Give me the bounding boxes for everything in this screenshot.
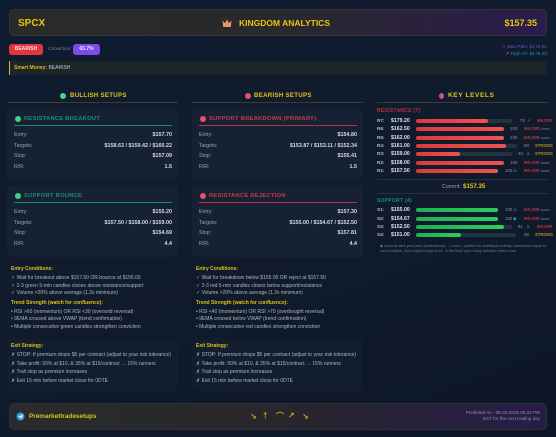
level S2 xyxy=(377,216,550,222)
heading: key levels: KEY LEVELS xyxy=(448,92,494,99)
level S1: S1: xyxy=(377,207,384,212)
level R4: R4: xyxy=(377,143,384,148)
level S4: 45 xyxy=(524,232,529,237)
conviction badge: 65.7% xyxy=(79,46,94,52)
card: support bounce: Entry: xyxy=(14,209,28,215)
card: support breakdown: Entry: xyxy=(199,132,213,138)
card: resistance rejection xyxy=(192,185,363,257)
trend strength heading: Trend Strength (watch for confluence): xyxy=(11,300,103,306)
icon: down arrow end: ↘ xyxy=(302,412,309,421)
level S4 xyxy=(377,232,553,238)
smart money bar xyxy=(9,61,547,75)
level R1: 100 xyxy=(505,168,512,172)
card: support bounce: $157.50 / $158.00 / $159.00 xyxy=(105,220,172,226)
card: resistance rejection: $155.00 / $154.67 / $152.50 xyxy=(290,220,357,226)
card: support bounce: Targets: xyxy=(14,220,32,226)
trend strength list: • 9EMA crossed below VWAP (trend confirmation) xyxy=(196,316,306,322)
level R5: $162.00 xyxy=(391,134,410,140)
trend strength list xyxy=(11,308,141,330)
bearish badge xyxy=(9,44,43,55)
card: resistance breakout: R/R: xyxy=(14,164,24,170)
level S2: $154.67 xyxy=(391,216,410,222)
card: support bounce xyxy=(7,185,178,257)
heading: bullish setups: BULLISH SETUPS xyxy=(70,92,127,99)
entry conditions list xyxy=(11,275,144,296)
level S4: STRONG xyxy=(535,232,553,237)
panel: key levels xyxy=(377,92,553,253)
entry conditions list: ✓ Wait for breakdown below $155.00 OR reject at $157.50 xyxy=(196,275,326,281)
level R4: STRONG xyxy=(535,143,553,148)
card: resistance breakout: $158.63 / $159.42 / $160.22 xyxy=(105,143,172,149)
exit strategy list xyxy=(196,352,356,384)
level S3: ⚓ xyxy=(526,224,530,229)
panel: bearish conditions xyxy=(196,266,326,330)
level S1: $155.00 xyxy=(391,207,410,213)
level R5 xyxy=(377,134,550,140)
card: resistance breakout: $157.09 xyxy=(152,153,172,159)
level R1: MAJOR xyxy=(524,168,539,172)
card: resistance breakout: Targets: xyxy=(14,143,32,149)
title: KINGDOM ANALYTICS xyxy=(239,18,330,28)
panel: bearish exit strategy xyxy=(192,338,363,391)
resistance heading: RESISTANCE (7) xyxy=(377,108,421,114)
card: resistance rejection: Entry: xyxy=(199,209,213,215)
card: resistance rejection: $157.30 xyxy=(338,209,357,215)
level S1: ⚓ xyxy=(513,207,517,212)
current price row: Current: xyxy=(442,184,461,190)
icon: crown xyxy=(222,20,232,27)
exit strategy list: ✗ STOP: If premium drops $5 per contract (adjust to your risk tolerance) xyxy=(196,352,356,358)
prediction timestamp: Predicted on - 08-22-2026 06:22 PM xyxy=(466,410,540,415)
card: support bounce: $154.69 xyxy=(152,230,172,236)
exit strategy list: ✗ Take profit: 50% at $10, & 35% at $15/contract → 15% runners xyxy=(196,361,341,367)
level R5: R5: xyxy=(377,134,384,140)
trend strength list: • Multiple consecutive green candles strengthen conviction xyxy=(11,324,141,330)
level R3: STRONG xyxy=(535,151,553,156)
card: resistance breakout: RESISTANCE BREAKOUT xyxy=(24,116,100,122)
card: support breakdown: $153.87 / $153.11 / $152.34 xyxy=(290,143,357,149)
level S3 xyxy=(377,224,552,230)
icon: curve: ⌒ xyxy=(276,412,284,421)
level R4: $161.00 xyxy=(391,143,410,149)
card: resistance breakout: 1.5 xyxy=(164,164,172,170)
panel: bullish setups xyxy=(7,92,178,247)
level S3: 91 xyxy=(518,224,523,229)
bearish badge: BEARISH xyxy=(15,46,37,52)
level R3: R3: xyxy=(377,151,384,156)
exit strategy heading: Exit Strategy: xyxy=(11,343,43,349)
level R3 xyxy=(377,151,553,157)
trend strength list: • Multiple consecutive red candles strengthen conviction xyxy=(196,324,320,330)
card: support bounce: SUPPORT BOUNCE xyxy=(24,193,82,199)
key levels note: ◆ unusual dark pool print (institutional) · □ zone = plotted for visibility/proximity, backtested equal to xyxy=(380,244,546,248)
exit strategy list: ✗ Take profit: 50% at $10, & 35% at $15/contract → 15% runners xyxy=(11,361,156,367)
level R7: $179.20 xyxy=(391,118,410,124)
smart money text: Smart Money: BEARISH xyxy=(14,65,70,71)
card: support bounce: $155.20 xyxy=(152,209,172,215)
card: resistance rejection: Stop: xyxy=(199,230,211,236)
level R2: R2: xyxy=(377,160,384,164)
entry conditions list: ✓ Wait for breakout above $157.50 OR bounce at $155.00 xyxy=(11,275,141,281)
panel: bearish setups xyxy=(192,92,363,256)
footer bar xyxy=(9,403,547,430)
card: resistance rejection: Targets: xyxy=(199,220,217,226)
current price value: $157.35 xyxy=(463,183,485,190)
conviction label: Conviction: xyxy=(48,47,72,52)
max pain: ∩ Max Pain: $172.50 xyxy=(501,44,547,50)
level R6: R6: xyxy=(377,126,384,131)
trend strength heading: Trend Strength (watch for confluence): xyxy=(196,300,288,306)
entry conditions list: ✓ 2-3 red 5-min candles closes below support/resistance xyxy=(196,282,322,288)
level R6: MAJOR xyxy=(524,126,539,131)
level R1 xyxy=(377,168,550,174)
level R2: MAJOR xyxy=(524,160,539,164)
exit strategy heading: Exit Strategy: xyxy=(196,343,228,349)
level S3: $152.50 xyxy=(391,224,410,230)
level R1: □ zone xyxy=(538,168,550,172)
level R7: 75 xyxy=(520,118,525,123)
card: support breakdown: SUPPORT BREAKDOWN (PRIMARY) xyxy=(209,116,316,122)
entry conditions heading: Entry Conditions: xyxy=(196,266,238,272)
card: support breakdown: $154.80 xyxy=(338,132,357,138)
key levels note xyxy=(380,244,546,253)
trend strength list: • RSI <40 (momentum) OR RSI >70 (overbought reversal) xyxy=(196,308,324,314)
level R4: 90 xyxy=(524,143,529,148)
level S2: 100 xyxy=(505,216,512,220)
current price: $157.35 xyxy=(504,18,537,28)
entry conditions heading: Entry Conditions: xyxy=(11,266,53,272)
level S2: ◆ xyxy=(513,216,516,220)
card: support breakdown xyxy=(192,108,363,180)
level R6: $162.50 xyxy=(391,126,410,132)
icon row: chart symbols xyxy=(250,411,309,421)
entry conditions list: ✓ Volume >20% above average (1.2x minimum) xyxy=(196,290,303,296)
icon: up arrow: ↗ xyxy=(288,411,295,420)
card: support breakdown: Stop: xyxy=(199,153,211,159)
ticker symbol: SPCX xyxy=(18,18,45,28)
high open interest: ↗ High OI: $179.20 xyxy=(505,50,547,56)
level R7: R7: xyxy=(377,118,384,123)
card: resistance rejection: RESISTANCE REJECTION xyxy=(209,193,286,199)
heading: bearish setups: BEARISH SETUPS xyxy=(254,92,312,99)
entry conditions list: ✓ 2-3 green 5-min candles closes above resistance/support xyxy=(11,282,143,288)
trend strength list: • 9EMA crossed above VWAP (trend confirmation) xyxy=(11,316,122,322)
card: resistance rejection: $157.81 xyxy=(338,230,357,236)
entry conditions list xyxy=(196,275,326,296)
card: support breakdown: R/R: xyxy=(199,164,209,170)
icon: dagger: † xyxy=(263,411,267,420)
card: resistance breakout: Stop: xyxy=(14,153,26,159)
key levels note: round strikes, not a higher-edge level. ⚓ the level your setup actually enters from. xyxy=(380,249,517,253)
level R6: □ zone xyxy=(538,127,550,131)
level R2: □ zone xyxy=(538,160,550,164)
card: resistance rejection: 4.4 xyxy=(350,241,357,247)
card: support breakdown: 1.5 xyxy=(350,164,357,170)
card: support bounce: 4.4 xyxy=(164,241,172,247)
card: resistance breakout xyxy=(7,108,178,180)
card: support bounce: R/R: xyxy=(14,241,24,247)
support heading: SUPPORT (4) xyxy=(377,198,412,204)
exit strategy list: ✗ Trail stop as premium increases xyxy=(196,369,272,375)
level R4 xyxy=(377,143,553,149)
level R3: $159.00 xyxy=(391,151,410,157)
level R3: ⚓ xyxy=(526,151,530,156)
level R2 xyxy=(377,160,550,166)
card: support breakdown: Targets: xyxy=(199,143,217,149)
channel name: Premarkettradesetups xyxy=(29,412,96,420)
panel: bullish conditions xyxy=(11,266,144,330)
conviction badge xyxy=(73,44,100,55)
level S1: 100 xyxy=(505,207,512,212)
level S2: S2: xyxy=(377,216,384,220)
level R3: 40 xyxy=(518,151,523,156)
level S1 xyxy=(377,207,550,213)
trend strength list xyxy=(196,308,324,330)
level R5: MAJOR xyxy=(524,134,539,140)
level S2: □ zone xyxy=(538,216,550,220)
level R7: MAJOR xyxy=(537,118,552,123)
card: resistance rejection: R/R: xyxy=(199,241,209,247)
entry conditions list: ✓ Volume >20% above average (1.2x minimum) xyxy=(11,290,118,296)
level R6 xyxy=(377,126,550,132)
trend strength list: • RSI >60 (momentum) OR RSI <30 (oversold reversal) xyxy=(11,308,133,314)
card: support bounce: Stop: xyxy=(14,230,26,236)
exit strategy list: ✗ Exit 15 min before market close for 0DTE xyxy=(196,378,293,384)
level R1: R1: xyxy=(377,168,384,172)
prediction timestamp xyxy=(466,410,540,421)
level S1: MAJOR xyxy=(524,207,539,212)
level R6: 100 xyxy=(510,126,517,131)
level S3: MAJOR xyxy=(537,224,552,229)
level R2: 100 xyxy=(510,160,517,164)
exit strategy list: ✗ Exit 15 min before market close for 0DTE xyxy=(11,378,108,384)
panel: bullish exit strategy xyxy=(7,338,178,391)
icon: telegram xyxy=(16,412,24,420)
exit strategy list xyxy=(11,352,171,384)
level R1: ⚓ xyxy=(513,168,517,172)
prediction timestamp: EST for the next trading day xyxy=(483,416,540,421)
level R2: $158.00 xyxy=(391,160,410,166)
card: resistance breakout: $157.70 xyxy=(152,132,172,138)
exit strategy list: ✗ STOP: If premium drops $5 per contract (adjust to your risk tolerance) xyxy=(11,352,171,358)
level S1: □ zone xyxy=(538,208,550,212)
level R5: 100 xyxy=(510,134,517,140)
level R7 xyxy=(377,118,552,124)
card: support breakdown: $155.41 xyxy=(338,153,357,159)
level R1: $157.50 xyxy=(391,168,410,174)
level S4: S4: xyxy=(377,232,384,237)
level S2: MAJOR xyxy=(524,216,539,220)
level S3: S3: xyxy=(377,224,384,229)
exit strategy list: ✗ Trail stop as premium increases xyxy=(11,369,87,375)
level R7: ↗ xyxy=(527,118,531,123)
level R5: □ zone xyxy=(538,136,550,140)
header bar xyxy=(9,9,547,36)
level S4: $151.00 xyxy=(391,232,410,238)
icon: down arrow: ↘ xyxy=(250,412,257,421)
card: resistance breakout: Entry: xyxy=(14,132,28,138)
